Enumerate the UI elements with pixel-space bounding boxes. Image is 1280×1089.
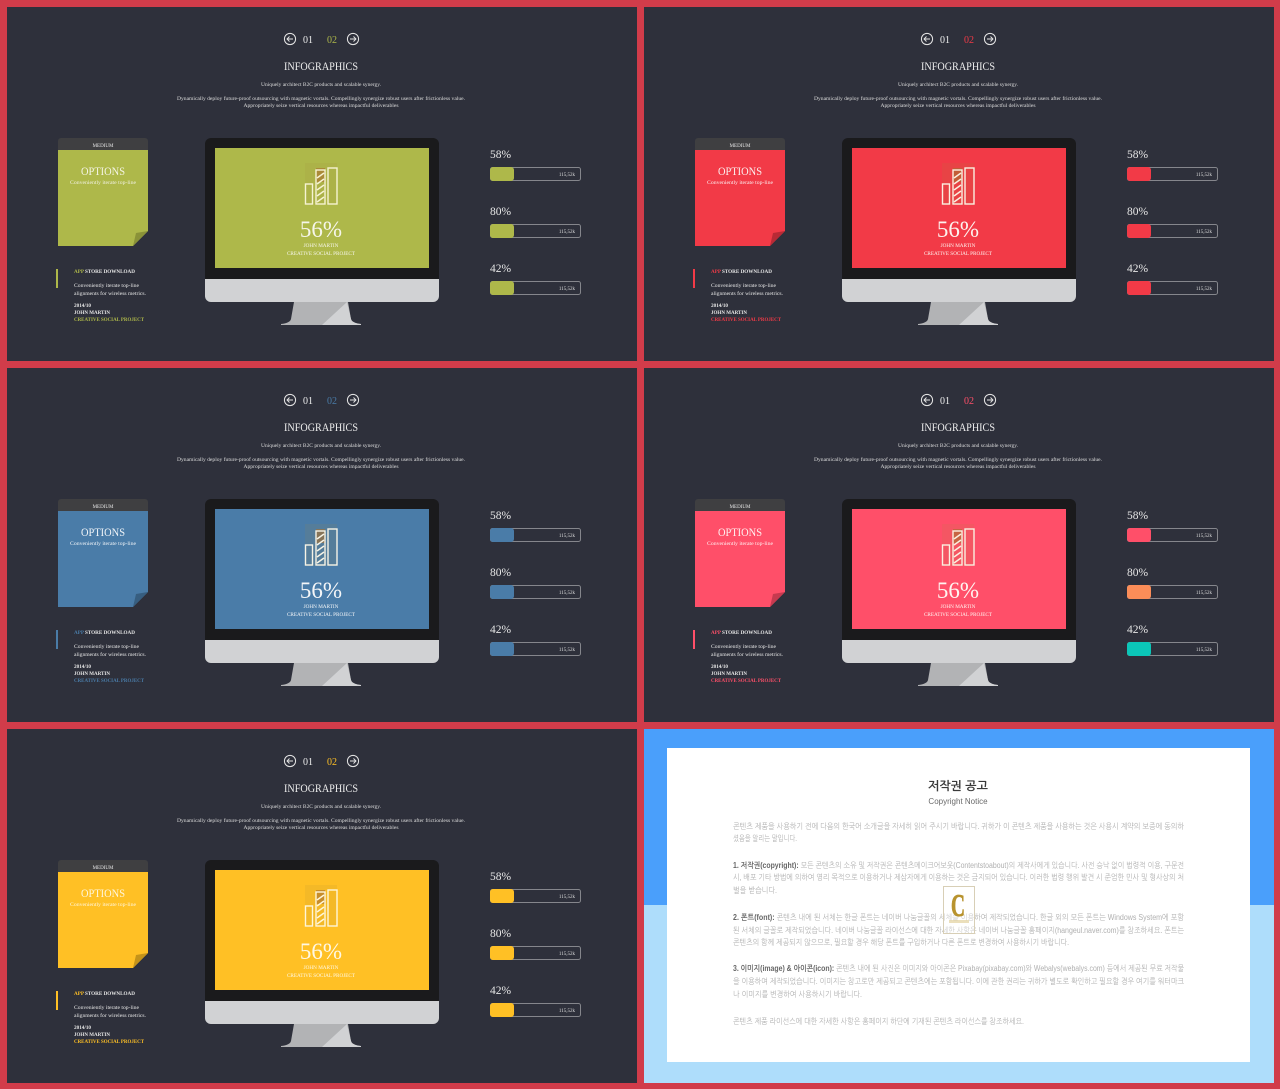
pagination	[284, 394, 359, 407]
notice body text: 콘텐츠의 함께 제공되지 않으므로, 필요할 경우 해당 폰트를 구입하거나 다른 폰트로 변경하여 사용하시기 바랍니다.	[733, 938, 1069, 947]
download text block: CREATIVE SOCIAL PROJECT	[711, 678, 782, 684]
sticky note card	[695, 499, 785, 607]
light blue lower band	[644, 905, 1274, 1083]
panel: olive slide	[7, 7, 637, 361]
progress bars: 58%	[490, 149, 512, 161]
sticky note card	[58, 860, 148, 968]
download text block	[693, 630, 783, 684]
screen stat: CREATIVE SOCIAL PROJECT	[924, 612, 993, 618]
intro text: Appropriately seize vertical resources whereas impactful deliverables	[880, 102, 1036, 109]
intro text	[177, 82, 466, 109]
intro text: Uniquely architect B2C products and scalable synergy.	[898, 443, 1019, 449]
screen stat: CREATIVE SOCIAL PROJECT	[287, 973, 356, 979]
progress bars: 42%	[1127, 263, 1148, 275]
screen stat: 56%	[937, 578, 979, 603]
screen stat	[287, 217, 356, 257]
download text block: JOHN MARTIN	[74, 671, 110, 677]
progress bars: 115,52k	[1196, 534, 1212, 539]
intro text: Appropriately seize vertical resources whereas impactful deliverables	[244, 102, 398, 109]
download text block: alignments for wireless metrics.	[711, 651, 783, 658]
pagination: 01	[940, 35, 950, 46]
heading: INFOGRAPHICS	[921, 61, 995, 73]
notice body text: 나 이미지를 변경하여 사용하시기 바랍니다.	[733, 990, 862, 999]
sticky note card: MEDIUM	[730, 144, 751, 149]
download text block	[56, 630, 146, 684]
intro text	[177, 443, 466, 470]
notice body text: 3. 이미지(image) & 아이콘(icon): 콘텐츠 내에 된 사진은 이미지와 아이콘은 Pixabay(pixabay.com)와 Webalys(webalys.com) 등에서 제공된 무료 저작물	[733, 964, 1184, 973]
download text block: JOHN MARTIN	[711, 310, 747, 316]
pagination	[921, 33, 996, 46]
intro text: Appropriately seize vertical resources whereas impactful deliverables	[880, 463, 1036, 470]
download text block: Conveniently iterate top-line	[74, 644, 140, 650]
download text block: 2014/10	[74, 664, 91, 670]
screen stat	[924, 578, 993, 618]
progress bars: 115,52k	[559, 173, 575, 178]
download text block: 2014/10	[711, 664, 728, 670]
sticky note card: MEDIUM	[93, 144, 114, 149]
progress bars: 115,52k	[1196, 173, 1212, 178]
notice body text: 시, 배포 기타 방법에 의하여 영리 목적으로 이용하거나 제삼자에게 이용하는 것은 금지되어 있습니다. 이러한 법령 행위 발견 시 준엄한 민사 및 형사상의 처	[733, 873, 1184, 882]
download text block: CREATIVE SOCIAL PROJECT	[74, 1039, 145, 1045]
download text block: alignments for wireless metrics.	[74, 290, 146, 297]
sticky note card	[695, 138, 785, 246]
monitor	[205, 499, 439, 686]
progress bars: 80%	[490, 928, 512, 940]
progress bars: 115,52k	[559, 591, 575, 596]
intro text: Dynamically deploy future-proof outsourcing with magnetic vortals. Compellingly synergize robust users after frictionless value.	[177, 95, 466, 102]
screen stat: JOHN MARTIN	[941, 243, 976, 249]
pagination: 02	[327, 396, 337, 407]
screen stat	[287, 939, 356, 979]
intro text	[177, 804, 466, 831]
progress bars: 115,52k	[559, 895, 575, 900]
screen stat: JOHN MARTIN	[304, 243, 339, 249]
monitor	[842, 499, 1076, 686]
download text block: Conveniently iterate top-line	[74, 283, 140, 289]
icon: bar chart	[305, 524, 337, 566]
download text block: alignments for wireless metrics.	[74, 651, 146, 658]
progress bars: 115,52k	[1196, 287, 1212, 292]
download text block	[56, 991, 146, 1045]
screen stat: CREATIVE SOCIAL PROJECT	[924, 251, 993, 257]
panel: pink slide	[644, 368, 1274, 722]
intro text: Uniquely architect B2C products and scalable synergy.	[261, 82, 382, 88]
intro text: Uniquely architect B2C products and scalable synergy.	[261, 443, 382, 449]
sticky note card: OPTIONS	[81, 888, 125, 900]
progress bars: 115,52k	[559, 534, 575, 539]
pagination	[921, 394, 996, 407]
download text block: CREATIVE SOCIAL PROJECT	[711, 317, 782, 323]
pagination: 02	[964, 396, 974, 407]
heading: INFOGRAPHICS	[284, 61, 358, 73]
download text block	[693, 269, 783, 323]
icon: bar chart	[942, 524, 974, 566]
progress bars: 115,52k	[559, 287, 575, 292]
download text block: APP STORE DOWNLOAD	[74, 269, 135, 275]
progress bars: 58%	[490, 871, 512, 883]
heading: INFOGRAPHICS	[284, 422, 358, 434]
sticky note card: Conveniently iterate top-line	[707, 180, 774, 186]
watermark logo: C	[951, 887, 965, 923]
sticky note card	[58, 499, 148, 607]
progress bars: 80%	[490, 567, 512, 579]
progress bars: 42%	[490, 985, 512, 997]
sticky note card: Conveniently iterate top-line	[70, 180, 137, 186]
sticky note card: OPTIONS	[81, 166, 125, 178]
intro text: Uniquely architect B2C products and scalable synergy.	[261, 804, 382, 810]
progress bars: 115,52k	[1196, 230, 1212, 235]
intro text: Dynamically deploy future-proof outsourcing with magnetic vortals. Compellingly synergize robust users after frictionless value.	[814, 95, 1103, 102]
notice body text: 벌을 받습니다.	[733, 886, 777, 895]
progress bars: 115,52k	[559, 648, 575, 653]
pagination	[284, 33, 359, 46]
pagination: 01	[303, 757, 313, 768]
screen stat: JOHN MARTIN	[941, 604, 976, 610]
sticky note card: OPTIONS	[718, 166, 762, 178]
progress bars: 115,52k	[559, 230, 575, 235]
intro text: Uniquely architect B2C products and scalable synergy.	[898, 82, 1019, 88]
download text block: JOHN MARTIN	[74, 1032, 110, 1038]
progress bars: 115,52k	[1196, 591, 1212, 596]
monitor	[205, 138, 439, 325]
notice body text: 셨음을 알리는 말입니다.	[733, 834, 797, 843]
screen stat	[287, 578, 356, 618]
progress bars: 58%	[490, 510, 512, 522]
download text block: JOHN MARTIN	[711, 671, 747, 677]
icon: bar chart	[305, 163, 337, 205]
download text block: Conveniently iterate top-line	[74, 1005, 140, 1011]
panel: red slide	[644, 7, 1274, 361]
sticky note card: Conveniently iterate top-line	[707, 541, 774, 547]
notice title: 저작권 공고	[928, 779, 989, 793]
intro text: Dynamically deploy future-proof outsourcing with magnetic vortals. Compellingly synergize robust users after frictionless value.	[177, 817, 466, 824]
intro text: Appropriately seize vertical resources whereas impactful deliverables	[244, 824, 398, 831]
progress bars: 42%	[490, 624, 512, 636]
download text block: Conveniently iterate top-line	[711, 644, 777, 650]
icon: bar chart	[942, 163, 974, 205]
screen stat: CREATIVE SOCIAL PROJECT	[287, 251, 356, 257]
notice body text: 2. 폰트(font): 콘텐츠 내에 된 서체는 한글 폰트는 네이버 나눔글꼴의 서체를 이용하여 제작되었습니다. 한글 외의 모든 폰트는 Windows System에 포함	[733, 913, 1184, 922]
progress bars: 80%	[1127, 206, 1148, 218]
notice body text: 콘텐츠 제품을 사용하기 전에 다음의 한국어 소개글을 자세히 읽어 주시기 바랍니다. 귀하가 이 콘텐츠 제품을 사용하는 것은 사용시 계약의 보증에 동의하	[733, 822, 1184, 831]
progress bars: 42%	[490, 263, 512, 275]
monitor	[842, 138, 1076, 325]
screen stat	[924, 217, 993, 257]
screen stat: JOHN MARTIN	[304, 604, 339, 610]
notice body text: 된 서체의 글꼴로 제작되었습니다. 네이버 나눔글꼴 라이선스에 대한 자세한 사항은 네이버 나눔글꼴 홈페이지(hangeul.naver.com)를 참조하세요. 폰트는	[733, 926, 1184, 935]
intro text: Appropriately seize vertical resources whereas impactful deliverables	[244, 463, 398, 470]
icon: bar chart	[305, 885, 337, 927]
sticky note card: OPTIONS	[81, 527, 125, 539]
notice body text	[733, 822, 1184, 1026]
progress bars: 115,52k	[559, 952, 575, 957]
pagination: 02	[327, 35, 337, 46]
watermark logo	[944, 886, 974, 934]
notice body text: 1. 저작권(copyright): 모든 콘텐츠의 소유 및 저작권은 콘텐츠메이크어보웃(Contentstoabout)의 제작사에게 있습니다. 사전 승낙 없이 법령적 이용, 구문전	[733, 861, 1184, 870]
download text block: Conveniently iterate top-line	[711, 283, 777, 289]
screen stat: 56%	[937, 217, 979, 242]
download text block: 2014/10	[711, 303, 728, 309]
progress bars: 115,52k	[1196, 648, 1212, 653]
notice body text: 을 이용하여 제작되었습니다. 이미지는 참고로만 제공되고 콘텐츠에는 포함됩니다. 이에 관한 권리는 귀하가 별도로 확인하고 필요할 경우 여기를 워터마크	[733, 977, 1184, 986]
sticky note card: MEDIUM	[93, 505, 114, 510]
sticky note card: MEDIUM	[730, 505, 751, 510]
sticky note card: OPTIONS	[718, 527, 762, 539]
panel: yellow slide	[7, 729, 637, 1083]
screen stat: CREATIVE SOCIAL PROJECT	[287, 612, 356, 618]
pagination: 01	[303, 35, 313, 46]
intro text: Dynamically deploy future-proof outsourcing with magnetic vortals. Compellingly synergize robust users after frictionless value.	[177, 456, 466, 463]
notice subtitle: Copyright Notice	[928, 797, 988, 806]
download text block: 2014/10	[74, 1025, 91, 1031]
download text block: JOHN MARTIN	[74, 310, 110, 316]
download text block: alignments for wireless metrics.	[74, 1012, 146, 1019]
sticky note card	[58, 138, 148, 246]
heading: INFOGRAPHICS	[284, 783, 358, 795]
sticky note card: Conveniently iterate top-line	[70, 902, 137, 908]
screen stat: 56%	[300, 217, 342, 242]
progress bars: 42%	[1127, 624, 1148, 636]
download text block: APP STORE DOWNLOAD	[74, 630, 135, 636]
progress bars: 58%	[1127, 149, 1148, 161]
download text block: APP STORE DOWNLOAD	[74, 991, 135, 997]
progress bars	[1127, 149, 1218, 295]
download text block: CREATIVE SOCIAL PROJECT	[74, 678, 145, 684]
progress bars: 80%	[1127, 567, 1148, 579]
monitor	[205, 860, 439, 1047]
progress bars: 58%	[1127, 510, 1148, 522]
screen stat: 56%	[300, 939, 342, 964]
progress bars: 80%	[490, 206, 512, 218]
notice body text: 콘텐츠 제품 라이선스에 대한 자세한 사항은 홈페이지 하단에 기재된 콘텐츠 라이선스를 참조하세요.	[733, 1017, 1024, 1026]
white notice card	[667, 748, 1250, 1062]
intro text	[814, 82, 1103, 109]
progress bars	[490, 871, 580, 1017]
download text block: APP STORE DOWNLOAD	[711, 630, 772, 636]
pagination	[284, 755, 359, 768]
pagination: 02	[964, 35, 974, 46]
panel: copyright notice	[644, 729, 1274, 1083]
screen stat: 56%	[300, 578, 342, 603]
progress bars	[490, 510, 580, 656]
intro text: Dynamically deploy future-proof outsourcing with magnetic vortals. Compellingly synergize robust users after frictionless value.	[814, 456, 1103, 463]
download text block: CREATIVE SOCIAL PROJECT	[74, 317, 145, 323]
heading: INFOGRAPHICS	[921, 422, 995, 434]
download text block: APP STORE DOWNLOAD	[711, 269, 772, 275]
sticky note card: MEDIUM	[93, 866, 114, 871]
download text block	[56, 269, 146, 323]
screen stat: JOHN MARTIN	[304, 965, 339, 971]
progress bars: 115,52k	[559, 1009, 575, 1014]
pagination: 01	[940, 396, 950, 407]
progress bars	[490, 149, 580, 295]
sticky note card: Conveniently iterate top-line	[70, 541, 137, 547]
download text block: alignments for wireless metrics.	[711, 290, 783, 297]
download text block: 2014/10	[74, 303, 91, 309]
progress bars	[1127, 510, 1218, 656]
pagination: 02	[327, 757, 337, 768]
pagination: 01	[303, 396, 313, 407]
panel: blue slide	[7, 368, 637, 722]
intro text	[814, 443, 1103, 470]
